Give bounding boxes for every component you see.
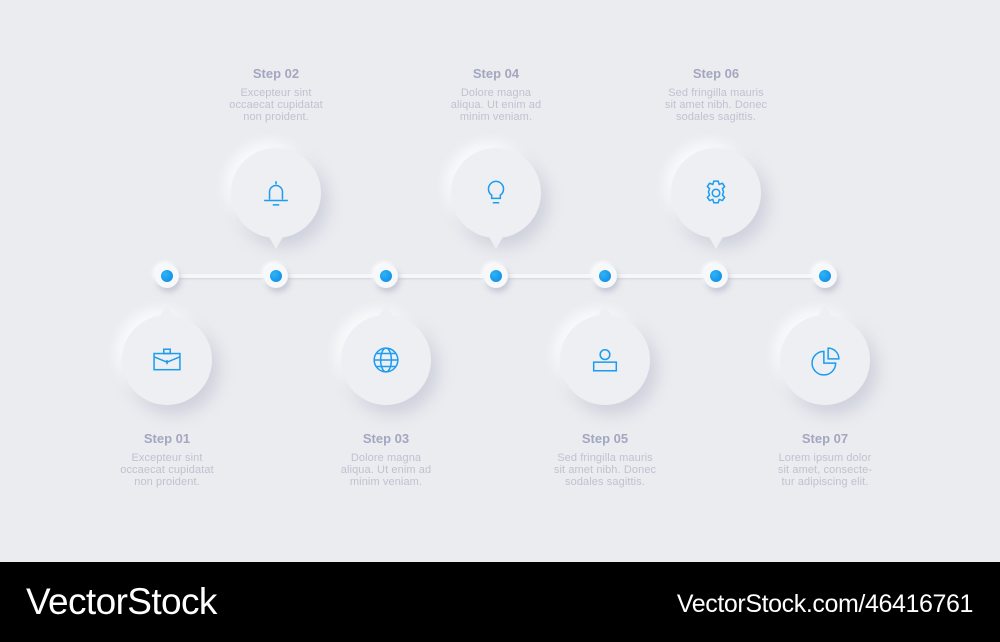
text: step 04: minim veniam. — [460, 111, 532, 123]
text: step 06: Sed fringilla mauris — [668, 87, 764, 99]
text: step 01: Step 01 — [144, 431, 190, 446]
text: step 07: sit amet, consecte- — [778, 464, 872, 476]
text: step 05: sit amet nibh. Donec — [554, 464, 656, 476]
step 04 bubble — [451, 148, 541, 238]
step 02 bubble — [231, 148, 321, 238]
text: step 05: Step 05 — [582, 431, 628, 446]
text: step 04: Step 04 — [473, 66, 519, 81]
icon: pie chart — [811, 347, 840, 376]
text: step 04: aliqua. Ut enim ad — [451, 99, 541, 111]
footer logo: VectorStock — [26, 581, 217, 622]
node dots — [153, 262, 841, 294]
icon: bulb — [488, 180, 504, 204]
text: step 03: aliqua. Ut enim ad — [341, 464, 431, 476]
text: step 02: occaecat cupidatat — [229, 99, 323, 111]
step 06 bubble — [671, 148, 761, 238]
icon: briefcase — [153, 348, 181, 370]
text: step 03 — [341, 431, 431, 488]
text: step 06: sodales sagittis. — [676, 111, 756, 123]
text: step 03: Dolore magna — [351, 452, 421, 464]
step 03 bubble — [341, 315, 431, 405]
timeline line — [167, 274, 825, 278]
icon: bell — [264, 181, 288, 206]
step 07 bubble — [780, 315, 870, 405]
text: step 01: occaecat cupidatat — [120, 464, 214, 476]
text: step 02: non proident. — [243, 111, 309, 123]
text: step 05: Sed fringilla mauris — [557, 452, 653, 464]
text: step 06: Step 06 — [693, 66, 739, 81]
text: step 04: Dolore magna — [461, 87, 531, 99]
icon: gear — [706, 180, 726, 204]
footer url: VectorStock.com/46416761 — [677, 590, 973, 618]
text: step 04 — [451, 66, 541, 123]
text: step 05: sodales sagittis. — [565, 476, 645, 488]
step 01 bubble — [122, 315, 212, 405]
text: step 01 — [120, 431, 214, 488]
text: step 07 — [778, 431, 872, 488]
text: step 01: non proident. — [134, 476, 200, 488]
text: step 07: Step 07 — [802, 431, 848, 446]
step 05 bubble — [560, 315, 650, 405]
text: step 03: Step 03 — [363, 431, 409, 446]
text: step 06 — [665, 66, 767, 123]
icon: globe — [373, 347, 399, 373]
text: step 02: Excepteur sint — [240, 87, 312, 99]
text: step 02 — [229, 66, 323, 123]
text: step 02: Step 02 — [253, 66, 299, 81]
text: step 07: tur adipiscing elit. — [782, 476, 868, 488]
text: step 03: minim veniam. — [350, 476, 422, 488]
text: step 07: Lorem ipsum dolor — [779, 452, 871, 464]
footer bar — [0, 562, 1000, 642]
icon: user — [592, 349, 618, 372]
text: step 01: Excepteur sint — [131, 452, 203, 464]
text: step 06: sit amet nibh. Donec — [665, 99, 767, 111]
text: step 05 — [554, 431, 656, 488]
